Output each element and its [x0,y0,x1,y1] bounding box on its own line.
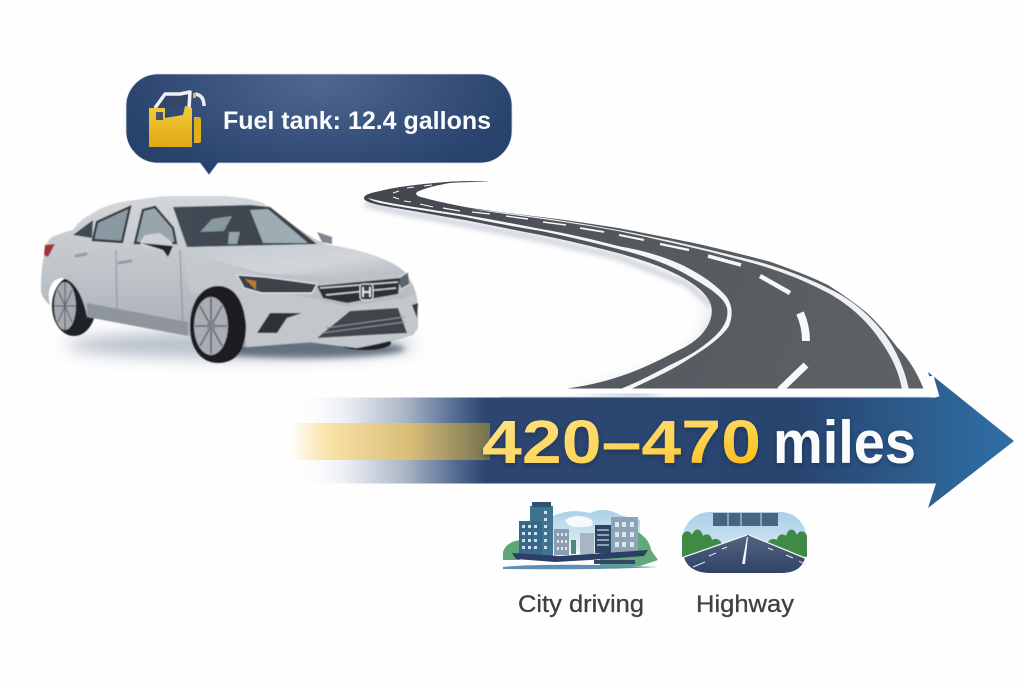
range value: 420–470 [482,408,761,476]
side mirror [140,233,173,257]
far headlight [397,272,410,289]
front fender highlight [183,250,262,300]
fading gold strip [290,423,490,460]
windshield [173,205,317,247]
far front tire [339,336,391,350]
grille [317,278,400,303]
car bumper [232,282,418,348]
door handles [76,254,131,263]
door seams [116,250,183,330]
distance arrow [290,372,1014,508]
lower intake [317,308,407,338]
icon: city driving [503,502,658,569]
bubble label: Fuel tank: 12.4 gallons [223,107,491,135]
label: highway: Highway [696,591,794,618]
car hood [203,245,405,276]
far mirror [317,232,332,244]
right side vent [412,303,418,318]
winding road [364,181,924,400]
rear tire [52,276,96,336]
rear side window [93,207,130,242]
front side window [135,207,176,243]
road centre dashes [393,185,806,390]
road outer edge line [470,209,909,390]
icon: highway [682,512,807,573]
taillight [44,244,55,257]
unit label: miles [773,409,916,476]
fog lamp [257,313,302,333]
label: city driving: City driving [518,591,644,618]
front wheel [190,286,246,363]
road inner edge line [368,198,732,390]
speech bubble: fuel tank [126,74,512,175]
rear wheel [54,282,76,330]
headlight [237,275,317,293]
rear quarter window [73,220,93,238]
badge [360,284,373,300]
car: silver sedan [41,196,418,363]
car ground shadow [65,332,415,358]
car body [41,196,418,348]
icon: fuel can [149,92,204,147]
lower door shade [87,303,188,336]
tree lines [682,529,807,557]
